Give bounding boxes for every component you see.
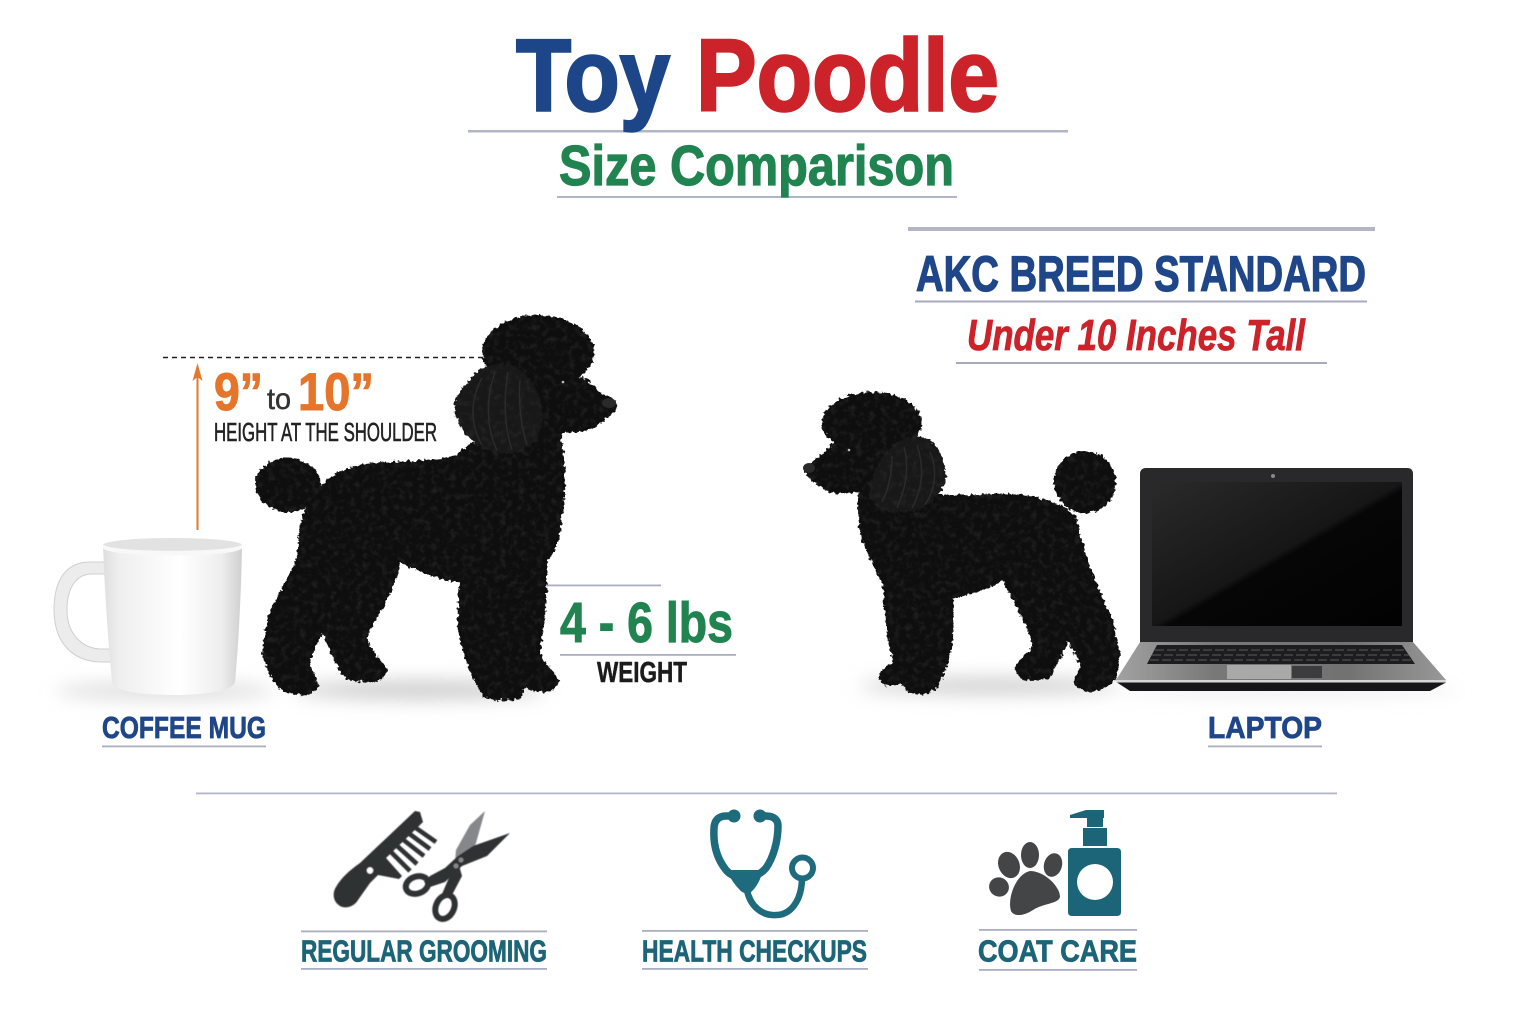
poodle body and legs xyxy=(262,433,565,700)
height measure guide xyxy=(163,358,484,530)
laptop camera xyxy=(1271,474,1275,478)
shampoo bottle xyxy=(1068,810,1121,916)
ground shadow: right group xyxy=(860,678,1460,694)
illustration: smaller black toy poodle facing left xyxy=(804,392,1120,695)
title: Toy xyxy=(516,18,670,132)
title xyxy=(468,18,1068,132)
poodle ear strands, eye and nose details xyxy=(473,372,616,450)
icon: comb and scissors xyxy=(334,811,510,922)
second poodle tail pompom xyxy=(1054,451,1116,513)
label: laptop: LAPTOP xyxy=(1208,710,1322,745)
illustration: laptop xyxy=(1116,468,1446,691)
scissors xyxy=(403,811,510,922)
laptop base xyxy=(1116,642,1446,680)
paw print xyxy=(986,842,1065,915)
AKC breed standard heading: Under 10 Inches Tall xyxy=(967,311,1306,360)
ground shadow: left group xyxy=(55,681,545,699)
weight callout: WEIGHT xyxy=(597,657,687,689)
laptop front edge xyxy=(1116,680,1446,682)
laptop palm rest and trackpad xyxy=(1227,665,1291,679)
illustration: large black toy poodle facing right xyxy=(255,315,617,700)
weight callout: 4 - 6 lbs xyxy=(560,591,733,655)
icon: white coffee mug xyxy=(54,538,242,695)
icon: paw print and shampoo bottle xyxy=(986,810,1121,916)
height label: HEIGHT AT THE SHOULDER xyxy=(214,417,437,447)
label: health checkups: HEALTH CHECKUPS xyxy=(642,934,867,968)
comb xyxy=(334,811,436,907)
poodle tail pompom xyxy=(255,458,321,512)
icon: stethoscope xyxy=(714,810,813,915)
poodle head pompom xyxy=(482,315,594,389)
laptop screen xyxy=(1152,482,1402,626)
height label: 9” xyxy=(214,363,263,422)
laptop keyboard xyxy=(1147,645,1415,664)
poodle head and neck filler xyxy=(480,370,617,460)
second poodle head pompom xyxy=(822,392,922,454)
height label xyxy=(214,363,437,447)
second poodle ear strands, eye and nose details xyxy=(803,445,935,508)
label: coat care: COAT CARE xyxy=(978,934,1137,968)
label: coffee mug: COFFEE MUG xyxy=(102,710,266,745)
divider xyxy=(196,792,1337,794)
label: regular grooming: REGULAR GROOMING xyxy=(301,934,547,968)
weight callout xyxy=(546,584,736,689)
second poodle ear xyxy=(869,436,946,513)
height label: to xyxy=(267,383,291,416)
AKC breed standard heading: AKC BREED STANDARD xyxy=(916,246,1366,302)
height label: 10” xyxy=(298,363,374,422)
laptop lid xyxy=(1140,468,1413,642)
subtitle: Size Comparison xyxy=(559,134,954,198)
poodle ear xyxy=(455,363,542,453)
AKC breed standard heading xyxy=(908,227,1375,364)
title: Poodle xyxy=(696,18,999,132)
second poodle head and neck filler xyxy=(804,435,925,515)
second poodle body and legs xyxy=(858,493,1120,695)
